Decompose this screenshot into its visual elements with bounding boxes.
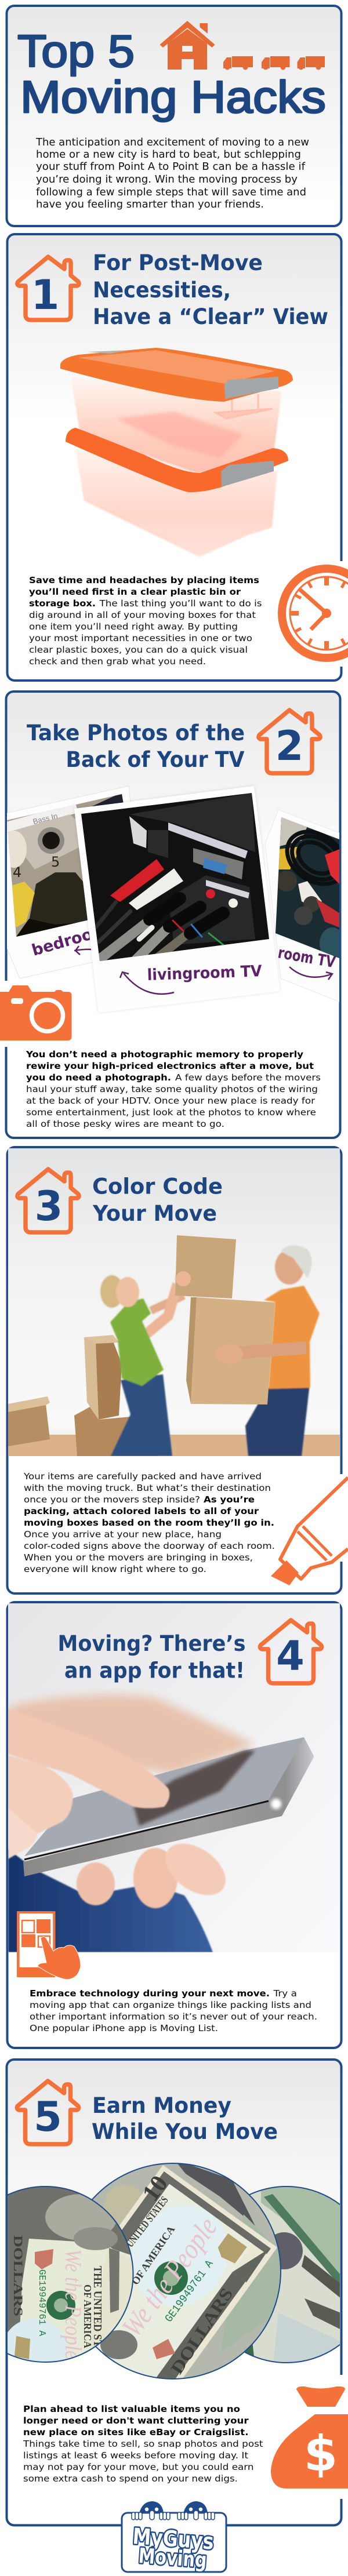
panel: hack 5 [0, 2060, 348, 2573]
body text: Save time and headaches by placing items [29, 575, 259, 585]
body text [26, 1049, 321, 1129]
body text: packing, attach colored labels to all of your [24, 1506, 259, 1516]
body text: listings at least 6 weeks before moving day. It [23, 2450, 248, 2461]
body text: storage box. [29, 598, 96, 609]
body text: may not pay for your move, but you could earn [23, 2462, 254, 2472]
icon: money bag [271, 2375, 348, 2499]
body text: check and then grab what you need. [29, 656, 206, 667]
circle photo: right [244, 2186, 340, 2363]
icon: house number 4 [260, 1620, 322, 1683]
body text: You don’t need a photographic memory to properly [26, 1049, 303, 1060]
icon: house number 1: 1 [31, 271, 59, 319]
intro text: your stuff from Point A to Point B can be a hassle if [36, 161, 306, 173]
heading [93, 250, 328, 329]
icon: house number 5 [17, 2081, 79, 2144]
heading: Your Move [92, 1201, 217, 1226]
icon: money bag: $ [304, 2425, 338, 2482]
body text: moving boxes based on the room they’ll go in. [24, 1518, 274, 1528]
body text: Once you arrive at your new place, hang [24, 1529, 222, 1540]
body text: everyone will know right where to go. [24, 1564, 206, 1574]
icon: house [160, 21, 215, 70]
sleeve [8, 1849, 213, 1952]
icon: house number 3: 3 [35, 1183, 63, 1230]
money photo circles [8, 2163, 340, 2379]
photo card: room TV [264, 809, 339, 1002]
intro text: you’re doing it wrong. Win the moving process by [36, 174, 298, 185]
fingers [8, 1708, 235, 1908]
icon: house number 1 [17, 257, 79, 320]
photo card: bedroom: bedroom [30, 921, 110, 960]
circle photo: left: DOLLARS [11, 2235, 26, 2316]
body text: One popular iPhone app is Moving List. [30, 2023, 218, 2033]
icon: house number 3 [17, 1169, 79, 1232]
circle photo: left: THE UNITED ST [91, 2266, 104, 2348]
photo: stacked clear plastic bins [60, 348, 293, 557]
logo: My Guys Moving: Moving [137, 2544, 208, 2573]
photo card: bedroom: 4 [13, 864, 21, 881]
body text: When you or the movers are bringing in boxes, [24, 1552, 253, 1563]
body text: Things take time to sell, so snap photos and post [23, 2439, 263, 2449]
photo card: bedroom: 5 [51, 854, 60, 870]
body text: you’ll need first in a clear plastic bin or [29, 587, 241, 597]
panel: hack 2 [0, 692, 348, 1138]
body text: Your items are carefully packed and have arrived [23, 1471, 262, 1482]
heading: Necessities, [93, 278, 231, 303]
title: Moving Hacks [20, 71, 326, 122]
intro text: home or a new city is hard to beat, but schlepping [36, 149, 301, 161]
icon: house number 2 [259, 710, 320, 773]
icon: house number 4: 4 [276, 1632, 304, 1680]
circle photo: middle: DOLLARS [167, 2284, 237, 2378]
panel: intro [7, 6, 341, 226]
body text: clear plastic boxes, you can do a quick visual [29, 645, 248, 655]
ten dollar bill [96, 2165, 277, 2378]
circle photo: left [8, 2186, 133, 2363]
photo card: livingroom TV [74, 786, 280, 1013]
body text: all of those pesky wires are meant to go. [26, 1119, 224, 1129]
circle photo: left: GE19949761 A [36, 2269, 47, 2337]
heading [27, 721, 245, 772]
logo: My Guys Moving [122, 2501, 226, 2573]
stacked boxes held [175, 1235, 306, 1405]
body text: new place on sites like eBay or Craigslist. [23, 2427, 248, 2437]
body text: color-coded signs above the doorway of each room. [24, 1541, 275, 1551]
panel: hack 3 [7, 1147, 348, 1593]
body text: A few days before the movers [175, 1072, 321, 1083]
phone [23, 1737, 314, 1876]
body text: other important information so it’s never out of your reach. [30, 2011, 317, 2022]
body text [23, 1471, 275, 1574]
body text: Embrace technology during your next move. [30, 1988, 270, 1999]
heading: While You Move [92, 2119, 278, 2144]
circle photo: left: We the People [60, 2249, 86, 2359]
heading [58, 1631, 246, 1683]
body text: As you’re [204, 1494, 255, 1505]
man [245, 1245, 320, 1456]
body text: Try a [273, 1988, 297, 1999]
icon: moving trucks [223, 56, 325, 70]
moving box stack, left [8, 1335, 157, 1456]
photo card: bedroom [7, 786, 130, 978]
intro text: have you feeling smarter than your friends. [36, 199, 264, 210]
body text [30, 1988, 317, 2033]
body text: one item you’ll need right away. By putting [29, 621, 238, 632]
icon: tablet with tapping hand [17, 1911, 81, 1980]
title [17, 26, 326, 122]
icon: house number 2: 2 [276, 722, 303, 770]
heading: Take Photos of the [27, 721, 245, 745]
circle photo: middle: GE19949761 A [162, 2257, 216, 2325]
photo card: bedroom: Bass In [32, 812, 59, 826]
circle photo: middle: UNITED STATES [124, 2194, 171, 2250]
body text: The last thing you’ll want to do is [99, 598, 262, 609]
icon: camera [0, 981, 72, 1047]
circle photo: middle: We the People [115, 2211, 223, 2342]
body text: moving app that can organize things like packing lists and [30, 2000, 311, 2010]
body text [29, 575, 262, 667]
intro text: following a few simple steps that will save time and [36, 187, 306, 198]
back hand [8, 1695, 255, 1774]
intro text [35, 137, 309, 210]
woman [100, 1270, 191, 1456]
heading: Color Code [92, 1174, 223, 1199]
body text: with the moving truck. But what’s their destination [24, 1483, 271, 1493]
body text: dig around in all of your moving boxes for that [29, 610, 256, 620]
circle photo: middle: 10 [137, 2171, 173, 2206]
title: Top 5 [17, 26, 135, 77]
circle photo: left: OF AMERICA [82, 2284, 93, 2348]
panel: hack 4 [7, 1602, 341, 2048]
photo: hands using smartphone [8, 1603, 340, 1952]
circle photo: middle: OF AMERICA [129, 2224, 177, 2287]
body text: haul your stuff away, take some quality photos of the wiring [26, 1084, 318, 1094]
heading: an app for that! [64, 1658, 245, 1683]
heading: Earn Money [92, 2093, 231, 2118]
body text: your most important necessities in one or two [29, 633, 252, 643]
body text: you do need a photograph. [26, 1072, 171, 1083]
heading [92, 2093, 278, 2144]
logo: My Guys Moving: MyGuys [132, 2523, 215, 2555]
body text: rewire your high-priced electronics after a move, but [26, 1061, 314, 1071]
polaroid photos of TV wiring [0, 786, 348, 1013]
heading: Moving? There’s [58, 1631, 246, 1656]
body text: at the back of your HDTV. Once your new place is ready for [26, 1096, 316, 1106]
heading: For Post-Move [93, 250, 263, 275]
heading: Back of Your TV [66, 747, 245, 772]
photo card: livingroom TV: livingroom TV [147, 962, 262, 984]
body text: some entertainment, just look at the photos to know where [26, 1107, 316, 1118]
icon: marker [271, 1474, 348, 1585]
intro text: The anticipation and excitement of moving to a new [35, 137, 309, 148]
icon: clock [282, 561, 348, 667]
body text [23, 2404, 263, 2484]
circle photo: middle [92, 2163, 281, 2379]
panel: hack 1 [7, 234, 348, 681]
body text: longer need or don't want cluttering your [23, 2415, 249, 2426]
photo: couple stacking moving boxes [8, 1148, 340, 1456]
body text: once you or the movers step inside? [24, 1494, 200, 1505]
body text: some extra cash to spend on your new digs. [23, 2473, 238, 2484]
heading: Have a “Clear” View [93, 304, 328, 329]
icon: house number 5: 5 [34, 2093, 62, 2141]
heading [92, 1174, 223, 1226]
body text: Plan ahead to list valuable items you no [23, 2404, 240, 2414]
